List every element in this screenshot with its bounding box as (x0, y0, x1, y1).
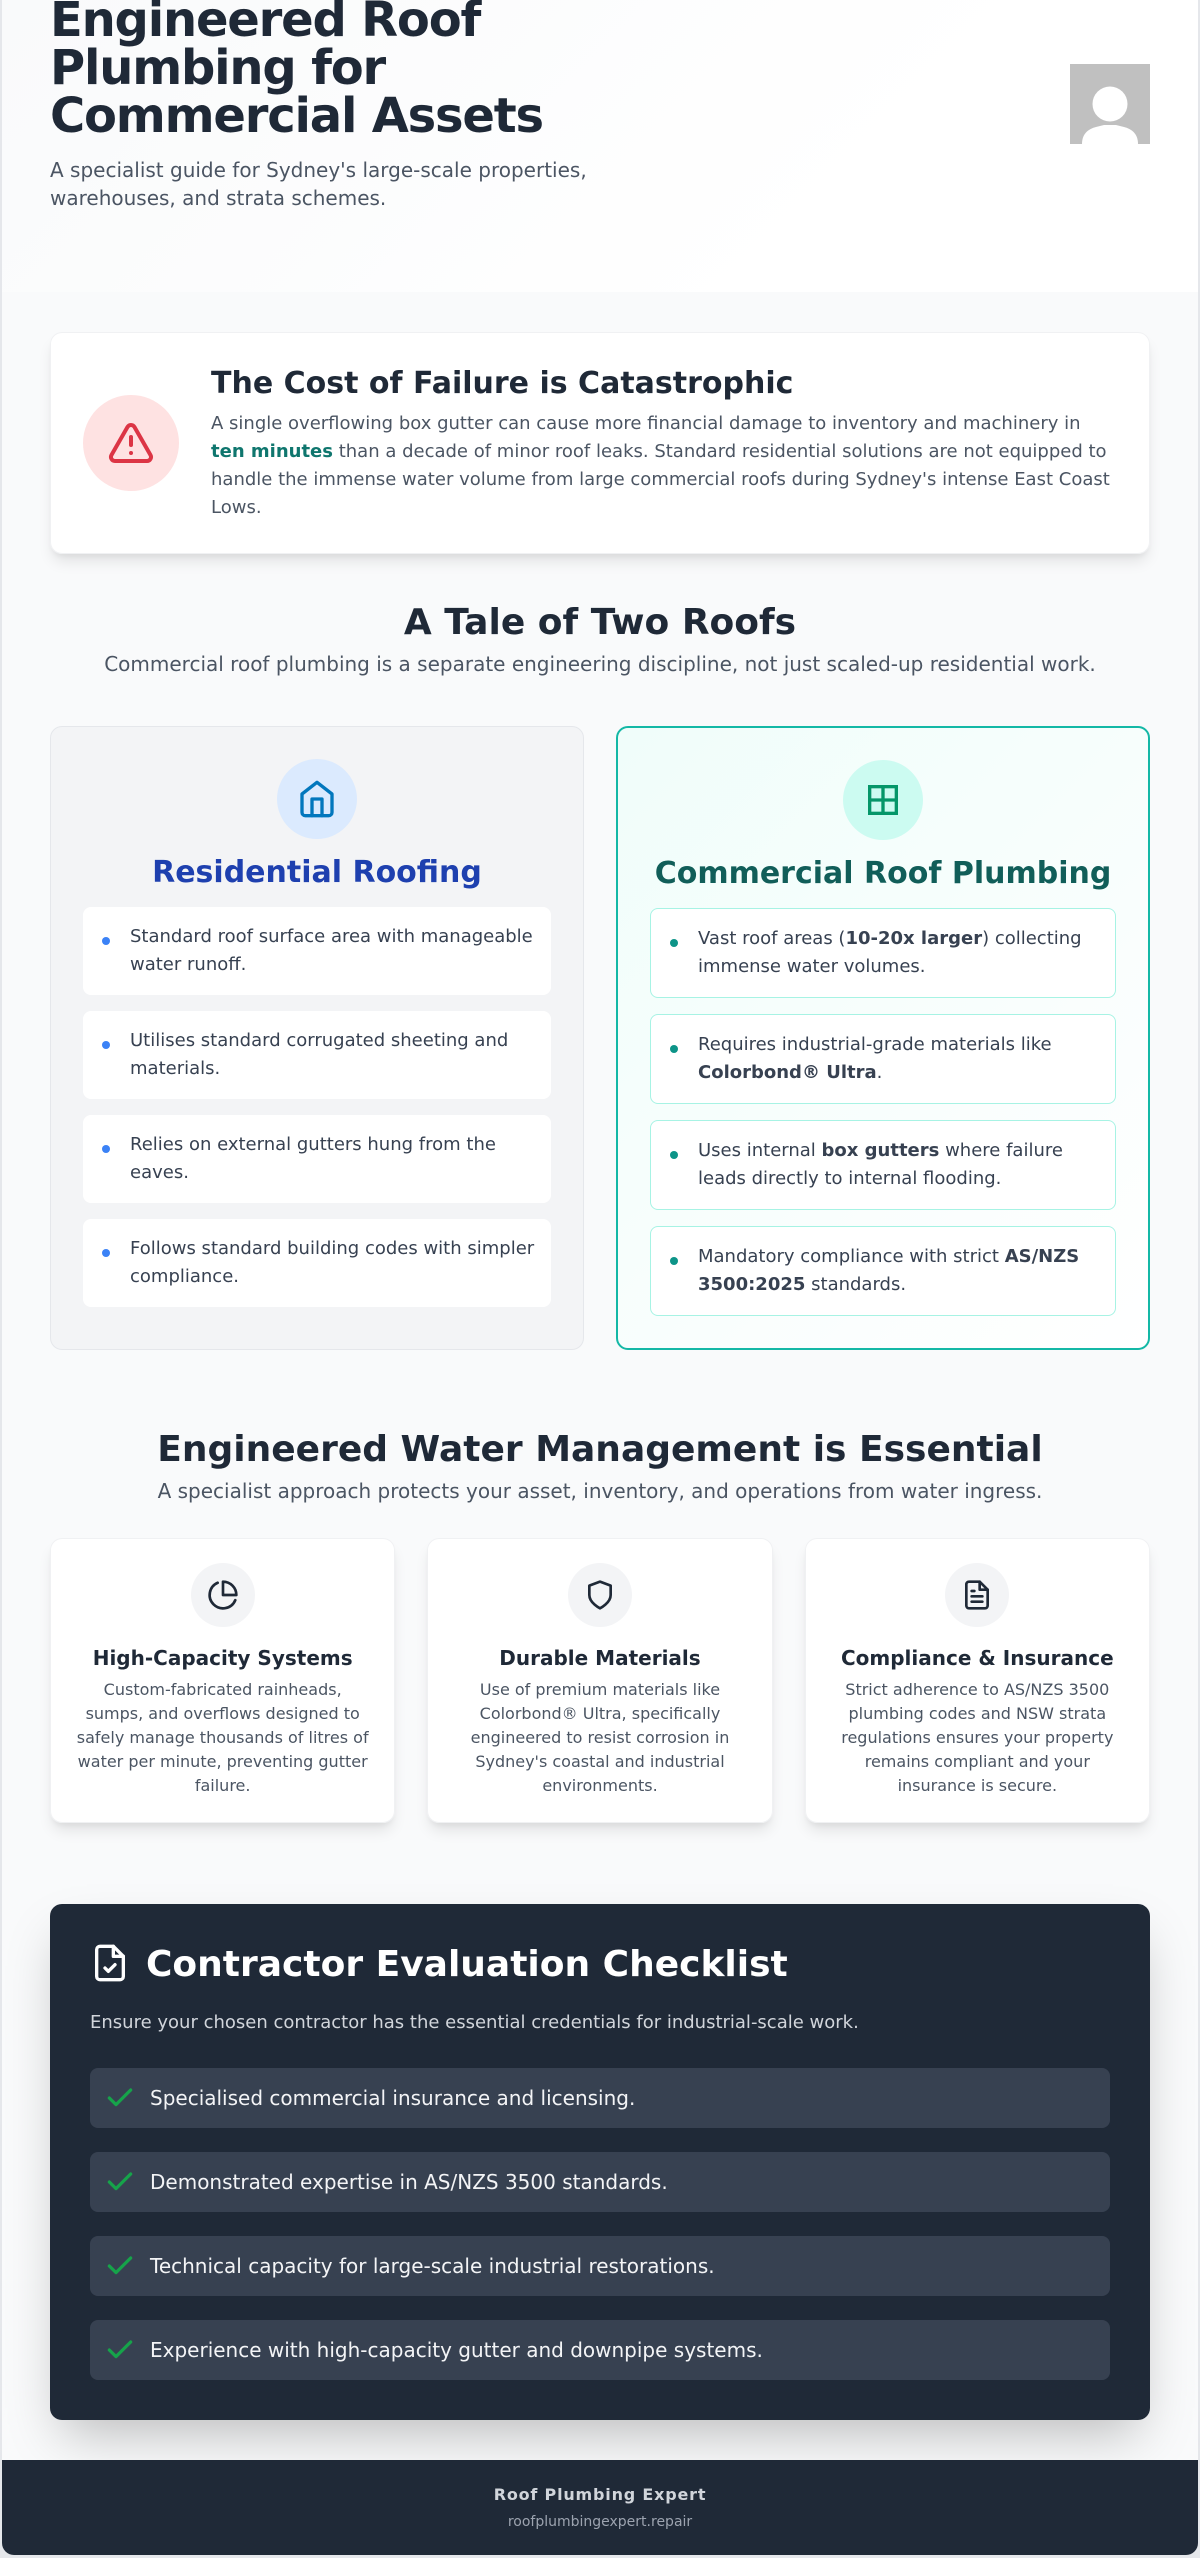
icon: grid (843, 760, 923, 840)
checklist heading: Contractor Evaluation Checklist (146, 1944, 788, 1985)
card text: Custom-fabricated rainheads, (104, 1680, 342, 1699)
icon: warning triangle (83, 395, 179, 491)
section title: Engineered Water Management is Essential (157, 1429, 1043, 1470)
residential item 2: materials. (130, 1058, 220, 1079)
card text: safely manage thousands of litres of (77, 1728, 369, 1747)
checklist item 3 (90, 2236, 1110, 2296)
icon: placeholder person image (1070, 64, 1150, 144)
header band (2, 0, 1198, 292)
card text: remains compliant and your (865, 1752, 1090, 1771)
residential item 2 (83, 1011, 551, 1099)
residential item 4 (83, 1219, 551, 1307)
commercial item 4: Mandatory compliance with strict AS/NZS (698, 1246, 1079, 1267)
icon: shield (568, 1563, 632, 1627)
commercial item 1: Vast roof areas (10-20x larger) collecting (698, 928, 1082, 949)
card text: sumps, and overflows designed to (86, 1704, 360, 1723)
checklist item 4: Experience with high-capacity gutter and downpipe systems. (150, 2338, 763, 2362)
footer url: roofplumbingexpert.repair (508, 2514, 692, 2530)
commercial item 2: Colorbond® Ultra. (698, 1062, 882, 1083)
panel: high-capacity systems (50, 1538, 395, 1823)
card text: failure. (195, 1776, 250, 1795)
callout body text: A single overflowing box gutter can cause more financial damage to inventory and machinery in (211, 413, 1081, 434)
card text (471, 1680, 729, 1795)
header subtitle (50, 158, 587, 210)
checklist item 1 (90, 2068, 1110, 2128)
footer brand: Roof Plumbing Expert (494, 2485, 706, 2504)
icon: document (945, 1563, 1009, 1627)
residential item 4: compliance. (130, 1266, 239, 1287)
card text: regulations ensures your property (841, 1728, 1113, 1747)
section title: A Tale of Two Roofs (404, 602, 796, 643)
card text: Strict adherence to AS/NZS 3500 (845, 1680, 1109, 1699)
commercial item 4 (650, 1226, 1116, 1316)
card text: Sydney's coastal and industrial (475, 1752, 725, 1771)
card text: engineered to resist corrosion in (471, 1728, 729, 1747)
section subtitle: A specialist approach protects your asset, inventory, and operations from water ingress. (158, 1479, 1042, 1503)
callout body text: Lows. (211, 497, 262, 518)
callout heading: The Cost of Failure is Catastrophic (211, 366, 793, 401)
panel: durable materials (427, 1538, 773, 1823)
checklist subtitle: Ensure your chosen contractor has the essential credentials for industrial-scale work. (90, 2012, 859, 2033)
commercial item 2: Requires industrial-grade materials like (698, 1034, 1052, 1055)
section subtitle: Commercial roof plumbing is a separate engineering discipline, not just scaled-up residential work. (104, 652, 1096, 676)
commercial item 4: 3500:2025 standards. (698, 1274, 906, 1295)
commercial item 1 (650, 908, 1116, 998)
title (50, 0, 543, 144)
title: Plumbing for (50, 40, 385, 96)
checklist item 4 (90, 2320, 1110, 2380)
card text: Use of premium materials like (480, 1680, 720, 1699)
residential item 3 (83, 1115, 551, 1203)
footer (2, 2460, 1198, 2555)
card text (77, 1680, 369, 1795)
checklist item 2: Demonstrated expertise in AS/NZS 3500 standards. (150, 2170, 668, 2194)
icon: file check (95, 1944, 125, 1982)
residential item 1: Standard roof surface area with manageable (130, 926, 533, 947)
card title: High-Capacity Systems (93, 1646, 353, 1670)
checklist item 2 (90, 2152, 1110, 2212)
header subtitle: A specialist guide for Sydney's large-scale properties, (50, 158, 587, 182)
residential item 3: Relies on external gutters hung from the (130, 1134, 496, 1155)
card title: Durable Materials (499, 1646, 701, 1670)
residential item 1: water runoff. (130, 954, 246, 975)
commercial heading: Commercial Roof Plumbing (655, 856, 1111, 891)
commercial item 3: leads directly to internal flooding. (698, 1168, 1001, 1189)
card text: environments. (542, 1776, 658, 1795)
callout body text (211, 413, 1110, 518)
callout body text: handle the immense water volume from large commercial roofs during Sydney's intense East Coast (211, 469, 1110, 490)
section heading: a tale of two roofs (104, 602, 1096, 676)
panel: commercial roof plumbing (616, 726, 1150, 1350)
card text: Colorbond® Ultra, specifically (480, 1704, 720, 1723)
section heading: engineered water management (157, 1429, 1043, 1503)
title: Commercial Assets (50, 88, 543, 144)
residential heading: Residential Roofing (152, 855, 482, 890)
header subtitle: warehouses, and strata schemes. (50, 186, 386, 210)
panel: residential roofing (50, 726, 584, 1350)
callout body text: ten minutes than a decade of minor roof leaks. Standard residential solutions are not equipped to (211, 441, 1107, 462)
commercial item 2 (650, 1014, 1116, 1104)
checklist item 1: Specialised commercial insurance and licensing. (150, 2086, 635, 2110)
panel: compliance and insurance (805, 1538, 1150, 1823)
residential item 2: Utilises standard corrugated sheeting and (130, 1030, 508, 1051)
card text: plumbing codes and NSW strata (849, 1704, 1106, 1723)
card title: Compliance & Insurance (841, 1646, 1114, 1670)
icon: pie chart (191, 1563, 255, 1627)
checklist item 3: Technical capacity for large-scale industrial restorations. (150, 2254, 715, 2278)
panel: contractor evaluation checklist (50, 1904, 1150, 2420)
card text: insurance is secure. (898, 1776, 1057, 1795)
commercial item 3: Uses internal box gutters where failure (698, 1140, 1063, 1161)
residential item 3: eaves. (130, 1162, 189, 1183)
card text: water per minute, preventing gutter (78, 1752, 368, 1771)
commercial item 1: immense water volumes. (698, 956, 926, 977)
card text (841, 1680, 1113, 1795)
icon: house (277, 759, 357, 839)
residential item 4: Follows standard building codes with simpler (130, 1238, 534, 1259)
commercial item 3 (650, 1120, 1116, 1210)
residential item 1 (83, 907, 551, 995)
panel: cost of failure callout (50, 332, 1150, 554)
